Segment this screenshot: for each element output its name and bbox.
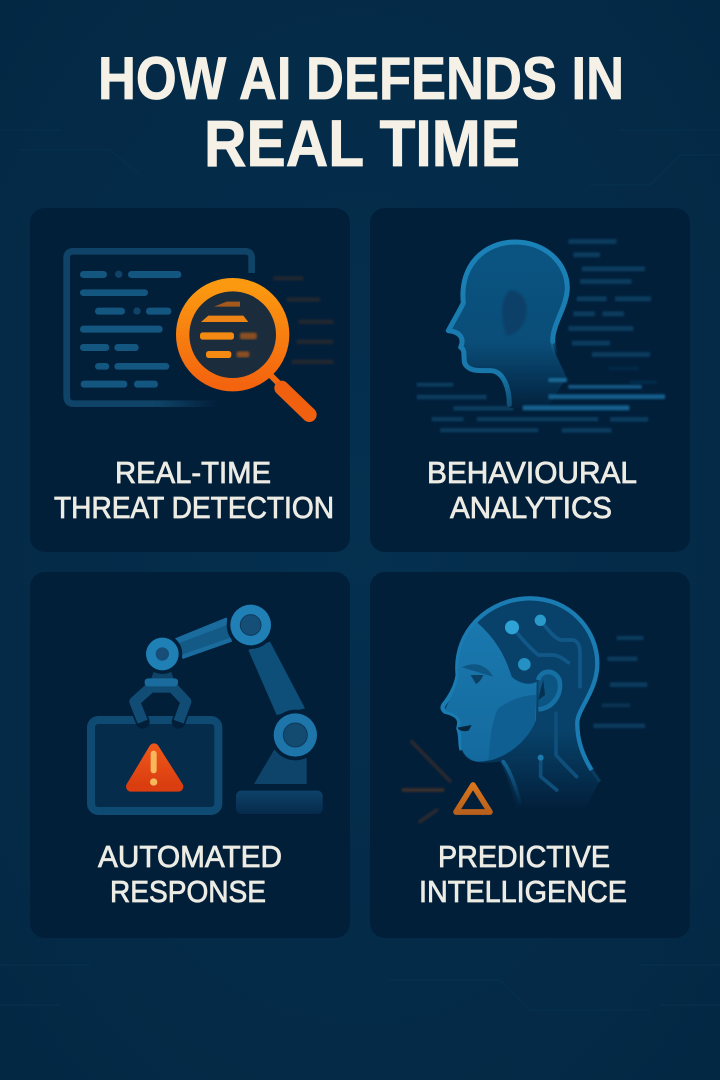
title: [98, 45, 624, 180]
label: AUTOMATED: [98, 839, 282, 874]
panel: behavioural analytics: [370, 208, 690, 552]
icon: head with data lines: [417, 239, 665, 433]
label: INTELLIGENCE: [419, 874, 627, 909]
label: [419, 839, 627, 909]
icon: AI head with warning triangle: [403, 598, 647, 822]
panel: real-time threat detection: [30, 208, 350, 552]
title: HOW AI DEFENDS IN: [98, 45, 624, 112]
head outline: [448, 242, 567, 405]
label: BEHAVIOURAL: [427, 455, 637, 490]
label: [54, 455, 334, 525]
panel: predictive intelligence: [370, 572, 690, 938]
panel: automated response: [30, 572, 350, 938]
label: [427, 455, 637, 525]
icon: robot arm lifting alert box: [91, 601, 323, 814]
label: RESPONSE: [110, 874, 266, 909]
label: PREDICTIVE: [438, 839, 610, 874]
label: REAL-TIME: [115, 455, 271, 490]
label: [98, 839, 282, 909]
head fill: [448, 242, 567, 408]
title: REAL TIME: [204, 106, 520, 180]
label: ANALYTICS: [450, 490, 612, 525]
label: THREAT DETECTION: [54, 490, 334, 525]
icon: code window with magnifying glass: [67, 251, 333, 415]
